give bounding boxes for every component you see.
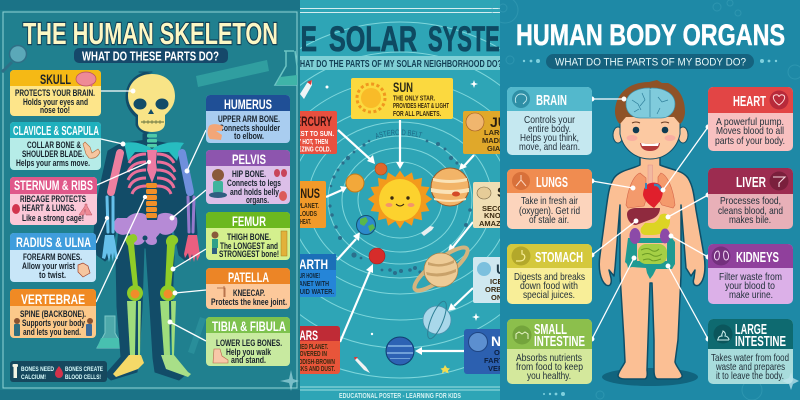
card: humerus: Connects shoulder <box>219 123 280 133</box>
icon: brain <box>76 72 96 87</box>
card: sun: THE ONLY STAR. <box>393 94 435 102</box>
panel: human body organs <box>492 0 800 400</box>
icon: magnifier <box>2 46 26 72</box>
liver <box>627 208 660 225</box>
card: mars: COVERED IN <box>296 349 327 358</box>
card: femur: THIGH BONE. <box>227 232 271 243</box>
card: venus <box>300 181 326 228</box>
card: sun <box>351 78 453 119</box>
card: saturn: KNOWN <box>484 211 513 220</box>
title: the solar system: SOLAR <box>329 20 417 59</box>
card: sternum and ribs: STERNUM & RIBS <box>14 178 93 193</box>
card: stomach: special juices. <box>523 289 575 301</box>
stomach <box>641 214 670 235</box>
card: liver: makes bile. <box>729 214 771 226</box>
icon: rockets <box>300 80 434 373</box>
decorative dots <box>523 59 777 396</box>
card: skull: Holds your eyes and <box>23 97 88 107</box>
bone: femurs <box>125 234 178 288</box>
card: heart: HEART <box>733 93 766 110</box>
decorative stars <box>326 80 480 374</box>
card: uranus <box>473 257 500 303</box>
icon: children bending <box>14 318 93 336</box>
card: sternum and ribs: RIBCAGE PROTECTS <box>20 194 86 205</box>
card: earth: PLANET WITH <box>292 279 329 288</box>
arrows to planets <box>326 120 474 355</box>
card: neptune: OUTER <box>494 348 521 357</box>
card: mars <box>300 326 340 374</box>
small intestine <box>638 244 667 264</box>
bone: kneecaps <box>127 285 176 301</box>
card: kidneys: your blood to <box>725 280 775 292</box>
dark body silhouette <box>94 72 197 380</box>
card: vertebrae: and lets you bend. <box>23 327 81 337</box>
card: mercury <box>300 111 337 154</box>
card: saturn: SECOND <box>482 204 515 213</box>
subtitle pill: WHAT DO THE PARTS OF MY BODY DO? <box>555 56 746 68</box>
card: radius and ulna: RADIUS & ULNA <box>16 234 91 250</box>
card: mercury: MERCURY <box>288 113 332 129</box>
badge: bone facts: BONES CREATE <box>65 366 103 373</box>
subtitle band <box>293 56 502 70</box>
card: large intestine <box>708 319 793 384</box>
card: radius and ulna: Allow your wrist <box>22 261 75 271</box>
card: neptune: VERY <box>488 364 508 373</box>
card: vertebrae: Supports your body <box>22 318 85 328</box>
panel: the human skeleton <box>0 0 300 400</box>
planet: mars <box>369 248 385 264</box>
card: femur: The LONGEST and <box>220 241 278 252</box>
card: lungs: (oxygen). Get rid <box>519 205 580 217</box>
icon: ruler <box>281 231 287 256</box>
large intestine <box>625 238 675 279</box>
card: heart: Moves blood to all <box>716 125 784 137</box>
card: patella: KNEECAP. <box>233 288 265 299</box>
planet: neptune <box>386 337 414 365</box>
card: liver: LIVER <box>736 174 766 191</box>
body <box>599 157 705 379</box>
card: jupiter: JUPITER <box>490 114 549 130</box>
card: clavicle and scapula: COLLAR BONE & <box>27 140 81 151</box>
card: tibia and fibula: and stand. <box>231 355 266 365</box>
card: stomach: STOMACH <box>535 249 583 266</box>
bone: lower legs <box>127 301 176 355</box>
card: lungs: LUNGS <box>536 174 568 191</box>
card: mars: MARS <box>292 327 318 343</box>
card: pelvis: PELVIS <box>232 151 266 167</box>
card: mercury: VERY HOT, THEN <box>288 137 328 146</box>
card: pelvis: Connects to legs <box>227 178 281 188</box>
card: small intestine: you healthy. <box>527 370 571 382</box>
badge: bone facts: BLOOD CELLS! <box>65 374 101 381</box>
card: sun: PROVIDES HEAT & LIGHT <box>393 101 449 110</box>
connector lines <box>590 97 710 341</box>
planet: jupiter <box>431 168 469 206</box>
card: earth: LIQUID WATER. <box>290 287 334 296</box>
card: stomach: Digests and breaks <box>514 271 585 283</box>
heart <box>643 183 663 208</box>
card: humerus: UPPER ARM BONE. <box>218 114 280 125</box>
card: humerus: to elbow. <box>234 131 264 141</box>
badge: bone facts: BONES NEED <box>21 366 54 373</box>
card: mars: RED PLANET. <box>298 342 328 351</box>
subtitle pill: WHAT DO THESE PARTS DO? <box>82 48 219 64</box>
card: lungs <box>507 169 592 229</box>
bone: feet <box>113 355 191 377</box>
sparkle <box>782 372 799 390</box>
card: patella: PATELLA <box>228 269 269 285</box>
card: skull: PROTECTS YOUR BRAIN. <box>15 88 95 99</box>
planet: saturn <box>412 246 470 292</box>
card: pelvis: organs. <box>246 195 269 205</box>
card: pelvis <box>206 150 290 205</box>
card: humerus: HUMERUS <box>224 96 272 112</box>
card: liver: cleans blood, and <box>718 205 783 217</box>
card: venus: VENUS <box>288 185 320 201</box>
card: sun: SUN <box>393 79 413 95</box>
card: neptune: FARTHEST <box>484 356 524 365</box>
planet: mercury <box>375 163 387 175</box>
card: brain: move, and learn. <box>519 141 580 153</box>
ears <box>613 127 688 143</box>
title: the human skeleton: THE HUMAN SKELETON <box>23 16 278 51</box>
face <box>626 122 676 151</box>
card: mercury: FREEZING COLD. <box>288 144 331 154</box>
card: heart <box>708 87 793 151</box>
card: saturn: AMAZING <box>479 219 514 228</box>
card: uranus: ON <box>491 293 502 302</box>
bone: left arm <box>102 153 120 262</box>
icon: flexed arm <box>83 142 100 158</box>
card: jupiter: MADE OF <box>482 136 517 145</box>
card: vertebrae: VERTEBRAE <box>21 291 85 307</box>
card: heart: parts of your body. <box>715 135 785 147</box>
bone: spine <box>146 183 157 218</box>
card: brain: Helps you think, <box>520 132 579 144</box>
card: small intestine <box>507 319 592 384</box>
card: uranus: ORBITS <box>485 285 513 294</box>
card: stomach: down food with <box>520 280 578 292</box>
icon: child stretching <box>212 232 218 254</box>
footer text: EDUCATIONAL POSTER - LEARNING FOR KIDS <box>339 391 461 400</box>
card: radius and ulna: to twist. <box>39 270 66 280</box>
subtitle band: WHAT DO THE PARTS OF MY SOLAR NEIGHBORHOOD DO? <box>293 59 502 70</box>
title: the solar system: THE <box>268 20 317 59</box>
card: tibia and fibula: TIBIA & FIBULA <box>212 318 286 334</box>
card: small intestine: SMALL <box>534 321 567 338</box>
card: uranus: ICE <box>490 277 503 286</box>
icon: knee <box>217 286 225 297</box>
planet: uranus <box>423 299 451 341</box>
card: venus: HOT PLANET. <box>285 201 319 210</box>
card: earth: OUR HOME! <box>296 271 320 280</box>
card: liver <box>708 168 793 229</box>
card: jupiter <box>463 111 500 154</box>
icon: sitting child <box>209 169 227 198</box>
card: tibia and fibula: Help you walk <box>226 347 272 357</box>
card: vertebrae <box>10 289 96 338</box>
icon: stomach <box>279 191 287 201</box>
card: small intestine: from food to keep <box>516 361 583 373</box>
card: pelvis: HIP BONE. <box>232 169 266 180</box>
card: brain: BRAIN <box>536 92 567 109</box>
card: skull <box>10 70 101 116</box>
card: radius and ulna: FOREARM BONES. <box>23 252 82 263</box>
head and hair <box>620 84 680 159</box>
card: saturn <box>473 182 500 228</box>
icon: kidneys <box>274 169 287 177</box>
bone: ribs <box>128 154 175 194</box>
bone: skull <box>128 74 175 132</box>
planet: sun <box>368 171 432 229</box>
card: mercury: CLOSEST TO SUN. <box>280 129 334 138</box>
card: tibia and fibula: LOWER LEG BONES. <box>216 338 282 349</box>
card: kidneys <box>708 244 793 304</box>
bone: clavicle and scapula <box>123 142 184 161</box>
card: patella: Protects the knee joint. <box>211 297 287 307</box>
asteroid belt dots <box>328 140 472 275</box>
card: neptune: NEPTUNE <box>491 333 558 349</box>
card: brain <box>507 87 592 155</box>
card: tibia and fibula <box>206 317 290 366</box>
card: earth <box>300 254 336 297</box>
card: heart: A powerful pump. <box>716 116 784 128</box>
brain <box>626 88 675 118</box>
card: saturn: SATURN <box>497 184 554 200</box>
card: clavicle and scapula: Helps your arms move. <box>16 158 90 168</box>
card: mars: REDDISH-BROWN <box>292 357 335 366</box>
card: clavicle and scapula: SHOULDER BLADE. <box>22 149 84 160</box>
card: jupiter: GIANT <box>487 144 511 153</box>
card: patella <box>206 268 290 309</box>
bone: sternum <box>147 150 157 183</box>
card: brain: Controls your <box>524 114 575 126</box>
skeleton figure <box>94 72 200 380</box>
card: femur: FEMUR <box>232 213 266 229</box>
sparkle <box>280 370 299 391</box>
connector lines <box>96 89 206 341</box>
card: femur <box>206 212 290 260</box>
card: liver: Processes food, <box>720 195 781 207</box>
card: femur: STRONGEST bone! <box>219 249 279 260</box>
kidneys <box>630 228 670 244</box>
card: mars: ROCKS AND DUST. <box>290 364 335 373</box>
bone: pelvis <box>114 213 177 245</box>
card: stomach <box>507 244 592 304</box>
card: venus: HEAT. <box>300 217 311 226</box>
card: clavicle and scapula: CLAVICLE & SCAPULA <box>13 123 99 138</box>
trachea <box>648 165 652 185</box>
card: lungs: of stale air. <box>529 214 569 226</box>
planet: earth <box>356 216 376 234</box>
planet: venus <box>346 174 364 192</box>
card: kidneys: make urine. <box>729 289 773 301</box>
bone: right arm <box>182 153 200 262</box>
card: skull: SKULL <box>40 71 71 87</box>
card: earth: EARTH <box>292 256 328 272</box>
lungs <box>626 173 675 208</box>
icon: ruler <box>188 60 269 354</box>
card: sternum and ribs: Like a strong cage! <box>22 213 84 223</box>
card: brain: entire body. <box>528 123 571 135</box>
icon: heart <box>12 204 20 214</box>
card: uranus: URANUS <box>496 261 556 277</box>
card: humerus <box>206 95 290 143</box>
card: large intestine: LARGE <box>735 321 767 338</box>
panel: the solar system <box>300 0 500 400</box>
badge: bone facts <box>10 361 107 382</box>
title: the solar system: SYSTEM <box>428 20 518 59</box>
card: neptune <box>464 329 500 374</box>
card: venus: CLOUDS <box>295 209 317 218</box>
card: sternum and ribs: HEART & LUNGS. <box>22 203 76 214</box>
card: sternum and ribs <box>10 177 97 225</box>
icon: arm <box>208 124 223 140</box>
title: the solar system <box>302 26 500 52</box>
card: clavicle and scapula <box>10 122 101 170</box>
card: skull: nose too! <box>40 105 70 115</box>
orbit rings <box>300 22 500 378</box>
card: pelvis: and holds belly <box>230 187 279 197</box>
card: vertebrae: SPINE (BACKBONE). <box>20 309 86 320</box>
card: small intestine: INTESTINE <box>534 333 585 350</box>
label: asteroid belt: ASTEROID BELT <box>376 130 422 139</box>
floor shadow <box>602 368 698 386</box>
card: radius and ulna <box>10 233 96 282</box>
icon: lungs <box>79 204 92 215</box>
icon: twisting hand <box>78 263 90 277</box>
card: jupiter: LARGEST <box>484 128 520 137</box>
card: sun: FOR ALL PLANETS. <box>393 109 441 118</box>
badge: bone facts: CALCIUM! <box>21 374 46 381</box>
icon: flask bottom <box>97 316 123 348</box>
bone: neck <box>147 134 157 148</box>
icon: flask top right <box>275 51 297 85</box>
icon: foot <box>213 349 228 363</box>
card: lungs: Take in fresh air <box>521 195 578 207</box>
card: small intestine: Absorbs nutrients <box>516 352 582 364</box>
card: kidneys: Filter waste from <box>719 271 782 283</box>
child figure <box>599 80 705 386</box>
